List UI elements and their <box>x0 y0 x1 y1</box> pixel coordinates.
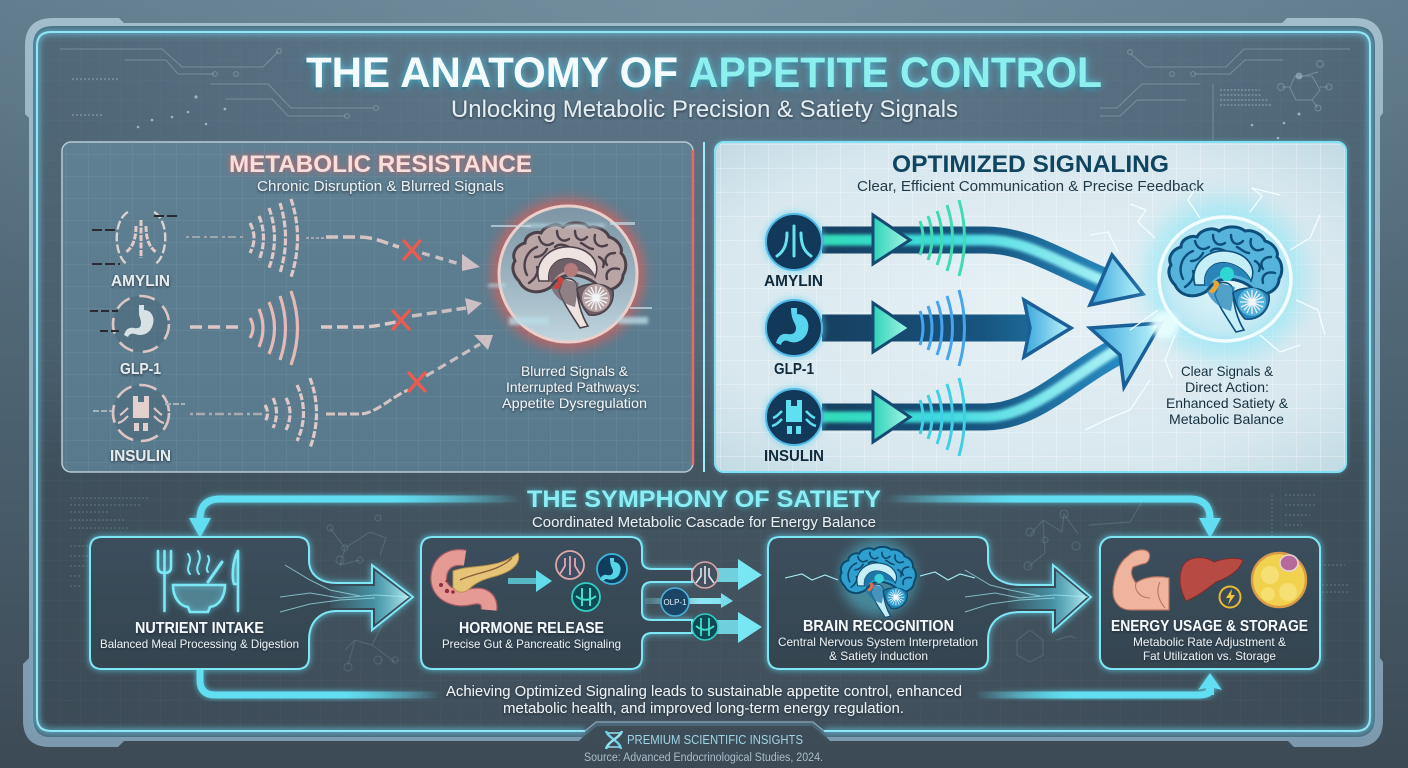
icon: dna helix <box>606 731 622 749</box>
icon: flexed arm <box>1113 550 1169 610</box>
caption: blurred signals <box>502 363 647 411</box>
card text: energy usage: Fat Utilization vs. Storage <box>1143 649 1276 663</box>
heading: symphony of satiety: THE SYMPHONY OF SATIETY <box>527 486 881 513</box>
card text: nutrient intake: Balanced Meal Processing & Digestion <box>100 637 299 651</box>
caption: clear signals: Clear Signals & <box>1181 363 1274 379</box>
title: APPETITE CONTROL <box>689 49 1102 97</box>
icon: insulin <box>763 386 825 448</box>
icon: red x insulin <box>409 373 425 391</box>
caption: clear signals: Enhanced Satiety & <box>1166 395 1289 411</box>
icon: mini insulin <box>572 583 600 611</box>
caption: clear signals: Direct Action: <box>1185 379 1269 395</box>
brain: blurred <box>488 199 652 349</box>
icon: red x amylin <box>404 241 420 259</box>
feedback loop: bottom left line <box>200 670 440 695</box>
feedback loop: top left arrow <box>189 499 520 538</box>
panel: optimized signaling <box>715 142 1346 472</box>
card: brain recognition <box>768 537 1091 669</box>
title: THE ANATOMY OF <box>306 49 678 97</box>
caption: blurred signals: Blurred Signals & <box>521 363 629 379</box>
icon: blurred insulin <box>93 385 185 441</box>
panel: metabolic resistance <box>62 142 693 472</box>
arrow: glp-1 output <box>645 588 733 616</box>
label: glp-1 left: GLP-1 <box>120 361 161 378</box>
feedback loop: bottom right arrow <box>975 673 1222 695</box>
arrow: amylin output <box>692 559 762 590</box>
arrow: amylin to brain <box>822 200 1143 305</box>
decorative circuits top-left <box>60 49 378 128</box>
subheading: chronic disruption: Chronic Disruption & Blurred Signals <box>257 178 504 195</box>
icon: mini stomach <box>597 554 627 584</box>
icon: stomach <box>763 297 825 359</box>
lightning: card 3 arrow <box>965 570 1088 625</box>
card text: energy usage <box>1133 635 1286 663</box>
label: amylin left: AMYLIN <box>111 273 170 290</box>
summary text <box>446 683 962 717</box>
card: energy usage and storage <box>1100 537 1320 669</box>
subtitle: Unlocking Metabolic Precision & Satiety Signals <box>451 96 958 123</box>
title <box>306 49 1102 97</box>
footer: brand: PREMIUM SCIENTIFIC INSIGHTS <box>627 732 803 747</box>
card title: hormone release: HORMONE RELEASE <box>459 620 604 637</box>
label: glp-1 right: GLP-1 <box>774 361 814 378</box>
card: hormone release <box>421 537 762 669</box>
feedback loop: top right arrow <box>885 499 1221 538</box>
summary text: metabolic health, and improved long-term energy regulation. <box>503 700 904 717</box>
icon: small brain with sparks <box>785 540 975 617</box>
card title: energy usage: ENERGY USAGE & STORAGE <box>1111 618 1308 635</box>
signal: amylin disrupted pathway <box>186 199 480 277</box>
icon: blurred amylin <box>92 212 180 265</box>
arrow: insulin output <box>692 612 762 643</box>
arrow: glp-1 to brain <box>822 290 1071 366</box>
subheading: clear communication: Clear, Efficient Communication & Precise Feedback <box>857 178 1204 195</box>
footer: source: Source: Advanced Endocrinological Studies, 2024. <box>584 752 823 764</box>
card text: hormone release: Precise Gut & Pancreatic Signaling <box>442 637 621 651</box>
card title: nutrient intake: NUTRIENT INTAKE <box>135 620 264 637</box>
heading: optimized signaling: OPTIMIZED SIGNALING <box>892 151 1169 178</box>
decorative circuits and molecule top-right <box>1100 49 1350 140</box>
card text: brain recognition <box>778 635 978 663</box>
label: insulin left: INSULIN <box>110 448 171 465</box>
arrow: glp-1 output: OLP-1 <box>663 598 687 607</box>
brain: clear with lightning <box>1085 188 1325 430</box>
caption: clear signals: Metabolic Balance <box>1169 411 1284 427</box>
card text: brain recognition: Central Nervous System Interpretation <box>778 635 978 649</box>
icon: blurred stomach <box>90 296 169 352</box>
label: insulin right: INSULIN <box>764 448 824 465</box>
subheading: coordinated cascade: Coordinated Metabolic Cascade for Energy Balance <box>532 514 876 531</box>
icon: red x glp-1 <box>393 311 409 329</box>
label: amylin right: AMYLIN <box>764 273 823 290</box>
icon: pancreas and duodenum <box>439 553 519 610</box>
icon: energy bolt <box>1220 586 1240 608</box>
decorative molecules in lower band <box>70 495 1350 671</box>
icon: mini amylin <box>556 551 584 579</box>
arrow: insulin to brain <box>822 323 1161 456</box>
caption: clear signals <box>1166 363 1289 427</box>
divider between panels <box>702 142 706 472</box>
icon: fork bowl knife <box>158 551 238 612</box>
heading: metabolic resistance: METABOLIC RESISTANCE <box>229 151 532 178</box>
caption: blurred signals: Appetite Dysregulation <box>502 395 647 411</box>
icon: liver <box>1180 558 1243 601</box>
icon: fat cell <box>1252 553 1306 607</box>
card text: energy usage: Metabolic Rate Adjustment & <box>1133 635 1286 649</box>
signal: glp-1 disrupted pathway <box>190 291 482 365</box>
icon: amylin <box>763 211 825 273</box>
arrow: pancreas to hormones <box>508 570 552 592</box>
card title: brain recognition: BRAIN RECOGNITION <box>803 618 954 635</box>
lightning: card 1 arrow <box>280 565 410 624</box>
signal: insulin disrupted pathway <box>190 335 493 448</box>
card text: brain recognition: & Satiety induction <box>829 649 928 663</box>
caption: blurred signals: Interrupted Pathways: <box>506 379 640 395</box>
summary text: Achieving Optimized Signaling leads to sustainable appetite control, enhanced <box>446 683 962 700</box>
card: nutrient intake <box>90 537 413 669</box>
